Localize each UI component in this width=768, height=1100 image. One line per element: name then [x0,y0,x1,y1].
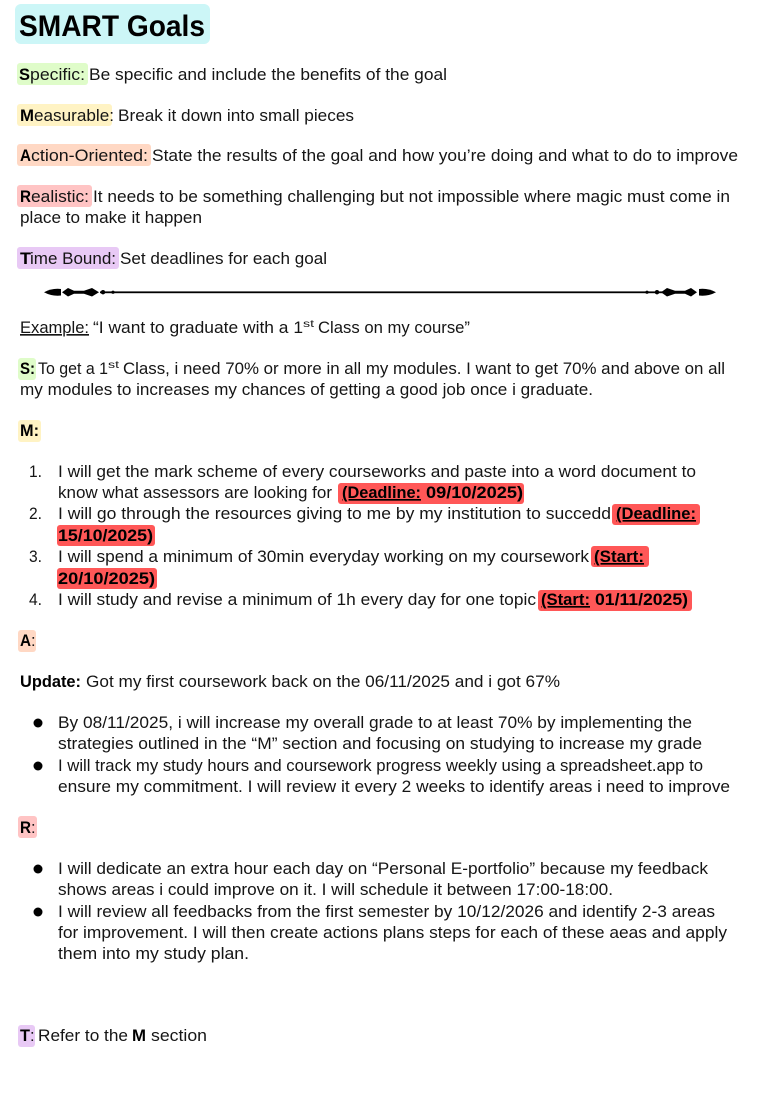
ornamental divider [44,288,716,296]
section S: S: [20,360,35,378]
section M numbered list: 1. [29,463,42,481]
definition: realistic [17,185,730,227]
section M numbered list: (Deadline: [342,484,421,502]
section A heading: : [31,632,36,650]
example statement: Class on my course” [318,319,470,337]
definition: realistic: ealistic: [31,188,89,206]
section M numbered list: 2. [29,505,42,523]
section M heading: M: [20,422,39,440]
definition: measurable [17,104,354,126]
section T: T [20,1027,30,1045]
section M numbered list: 01/11/2025) [595,591,688,609]
update note: Update: [20,673,81,691]
section R heading: : [31,819,36,837]
section R bullet list [34,860,728,963]
definition: realistic: It needs to be something challenging but not impossible where magic must come in [93,188,730,206]
definition: specific [17,63,447,85]
section R bullet list: I will dedicate an extra hour each day on “Personal E-portfolio” because my feedback [58,860,709,878]
section A bullet list: By 08/11/2025, i will increase my overall grade to at least 70% by implementing the [58,714,692,732]
section A bullet list [34,714,730,796]
section S: st [108,360,119,371]
definition: action-oriented [17,144,738,166]
section M numbered list: know what assessors are looking for [58,484,333,502]
section R bullet list: them into my study plan. [58,945,249,963]
section R bullet list: for improvement. I will then create actions plans steps for each of these aeas and apply [58,924,728,942]
section S [18,358,725,399]
section A bullet list: strategies outlined in the “M” section and focusing on studying to increase my grade [58,735,702,753]
section M numbered list [29,463,700,611]
definition: time bound: T [20,250,31,268]
section A bullet list: ensure my commitment. I will review it every 2 weeks to identify areas i need to improve [58,778,730,796]
definition: time bound: ime Bound: [30,250,116,268]
section A bullet list: I will track my study hours and coursework progress weekly using a spreadsheet.app to [58,757,703,775]
section A heading [18,630,36,652]
update note: Got my first coursework back on the 06/11/2025 and i got 67% [86,673,560,691]
section S: To get a 1 [38,360,108,378]
title: SMART Goals [19,10,205,43]
section M numbered list: I will spend a minimum of 30min everyday working on my coursework [58,548,590,566]
section M numbered list: (Start: [541,591,590,609]
definition: measurable: easurable: [34,107,114,125]
section R heading: R [20,819,31,837]
example statement [20,319,470,337]
section A heading: A [20,632,31,650]
section M heading [18,420,41,442]
example statement: st [303,319,314,330]
section R bullet list: shows areas i could improve on it. I will schedule it between 17:00-18:00. [58,881,613,899]
definition: realistic: R [20,188,31,206]
section T: : [30,1027,35,1045]
section M numbered list: (Deadline: [616,505,696,523]
definition: action-oriented: State the results of the goal and how you’re doing and what to do to improve [152,147,738,165]
definition: action-oriented: ction-Oriented: [31,147,148,165]
example statement: “I want to graduate with a 1 [93,319,303,337]
section S: Class, i need 70% or more in all my modules. I want to get 70% and above on all [123,360,725,378]
section T: section [151,1027,207,1045]
definition: action-oriented: A [20,147,31,165]
section T: Refer to the [38,1027,128,1045]
definition: specific: pecific: [30,66,85,84]
section S: my modules to increases my chances of getting a good job once i graduate. [20,381,593,399]
definition: realistic: place to make it happen [20,209,202,227]
section M numbered list: I will go through the resources giving to me by my institution to succedd [58,505,611,523]
definition: measurable: Break it down into small pieces [118,107,354,125]
section M numbered list: 3. [29,548,42,566]
section M numbered list: 09/10/2025) [426,484,523,502]
section M numbered list: 4. [29,591,42,609]
section M numbered list: I will get the mark scheme of every courseworks and paste into a word document to [58,463,696,481]
definition: specific: S [19,66,30,84]
section R bullet list: I will review all feedbacks from the first semester by 10/12/2026 and identify 2-3 areas [58,903,715,921]
section M numbered list: 15/10/2025) [58,527,153,545]
section M numbered list: (Start: [594,548,644,566]
section M numbered list: 20/10/2025) [58,570,155,588]
definition: time bound: Set deadlines for each goal [120,250,327,268]
example statement: Example: [20,319,89,337]
definition: time bound [17,247,327,269]
section M numbered list: I will study and revise a minimum of 1h every day for one topic [58,591,536,609]
section T [18,1025,207,1047]
definition: measurable: M [20,107,34,125]
section T: M [132,1027,146,1045]
section R heading [18,816,37,838]
definition: specific: Be specific and include the benefits of the goal [89,66,447,84]
